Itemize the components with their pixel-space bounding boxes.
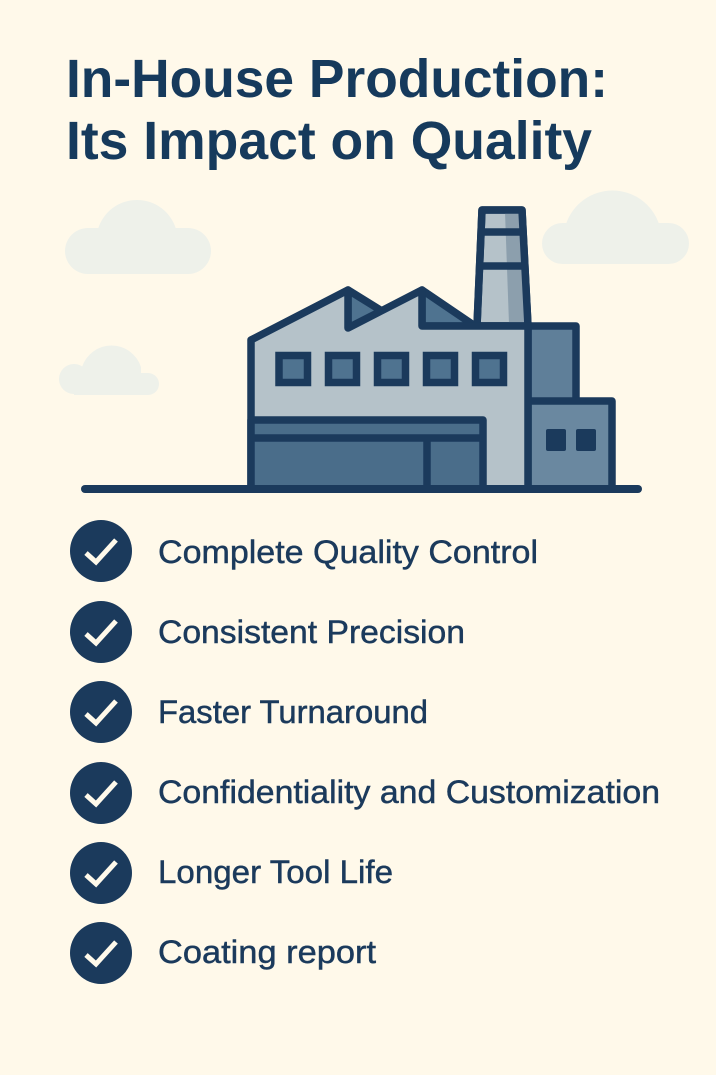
chimney xyxy=(477,210,528,326)
item: Confidentiality and Customization xyxy=(70,762,660,824)
item: Coating report: Coating report xyxy=(158,934,376,970)
cloud: left xyxy=(65,200,211,274)
checklist xyxy=(70,520,660,984)
garage door xyxy=(251,420,483,489)
main building xyxy=(251,290,528,489)
cloud: small xyxy=(59,346,159,395)
title: Its Impact on Quality xyxy=(66,111,592,171)
item: Longer Tool Life: Longer Tool Life xyxy=(158,854,393,890)
right lower block xyxy=(528,401,612,489)
item: Consistent Precision: Consistent Precision xyxy=(158,614,465,650)
right upper block xyxy=(528,326,576,402)
item: Complete Quality Control: Complete Quality Control xyxy=(158,534,538,570)
item: Confidentiality and Customization: Confidentiality and Customization xyxy=(158,774,660,810)
item: Faster Turnaround xyxy=(70,681,428,743)
block windows xyxy=(546,429,596,451)
item: Longer Tool Life xyxy=(70,842,393,904)
item: Faster Turnaround: Faster Turnaround xyxy=(158,694,428,730)
item: Consistent Precision xyxy=(70,601,465,663)
roof triangles xyxy=(348,290,475,328)
item: Complete Quality Control xyxy=(70,520,538,582)
cloud: right xyxy=(542,190,689,264)
ground line xyxy=(85,485,638,493)
item: Coating report xyxy=(70,922,376,984)
title xyxy=(66,49,608,171)
title: In-House Production: xyxy=(66,49,608,109)
row of windows xyxy=(279,356,504,382)
factory illustration xyxy=(251,210,612,489)
